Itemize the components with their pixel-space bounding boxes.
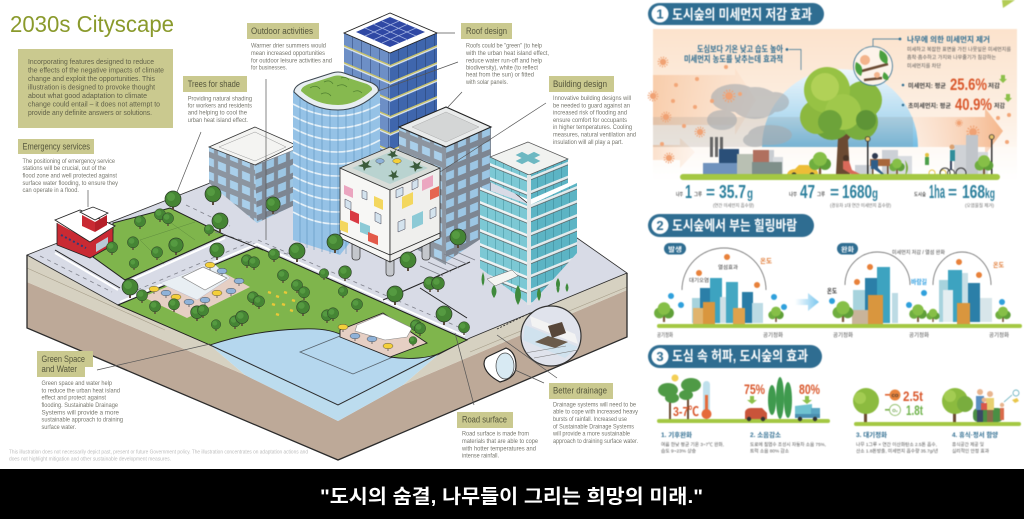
text: air purification: 3. 대기정화 [856,430,887,439]
stat row: 35.7 [719,182,746,202]
stat: ultrafine dust 40.9%: 40.9% [955,95,992,114]
callout: building design: ensure comfort for occupants [553,117,627,124]
arrow between diagrams [795,293,819,311]
callout: roof design: reduce water run-off and help [466,57,542,64]
shore pavilion [338,313,427,357]
callout: outdoor activities [247,23,332,71]
callout: green space and water: surface water. [42,424,76,431]
callout: emergency services: flood zone and well protected against [22,172,117,180]
text: climate relief: 1. 기후완화 [661,430,692,439]
wind corridor after diagram: 미세먼지 저감 / 열섬 완화 [892,249,945,256]
intro box: change and exploit the opportunities. This [28,76,155,83]
air purification labels: 공기정화 [909,331,929,339]
heat island before diagram [654,243,787,324]
stat: fine dust 25.6%: 미세먼지: 평균 [908,82,946,90]
callout: green space and water: flooding. Sustainable Drainage [42,402,118,409]
section 1 heading: 도시숲의 미세먼지 저감 효과 [672,6,812,22]
leaf removal text: 미세하고 복잡한 표면을 가진 나뭇잎은 미세먼지를 [907,46,1011,53]
parking bays [420,250,475,276]
city forest caption [684,44,801,70]
callout: outdoor activities: for businesses. [251,64,287,71]
callout: outdoor activities: mean increased opportunities [251,50,325,57]
tall blue solar building [344,13,437,155]
text: rest and wellbeing: 휴식공간 제공 및 [952,441,985,448]
callout: emergency services: stations will be crucial, out of the [22,165,106,172]
icon: air purification: 2.5t [903,388,923,404]
ground strip 3b [854,422,1021,426]
icon: air purification: CO [892,393,899,398]
callout: trees for shade: Trees for shade [188,79,240,89]
section 2 heading: 도시숲에서 부는 힐링바람 [672,218,797,234]
callout: green space and water: Green space and water help [42,380,112,387]
road markings [40,190,470,332]
intro box: change could entail – it does not attempt to [28,101,160,108]
city forest caption: 도심보다 기온 낮고 습도 높아 [697,44,783,54]
callout: trees for shade: urban heat island effect. [188,117,248,124]
stat row: (경유차 1대 연간 미세먼지 흡수량) [830,202,891,209]
stat row: 그루 [817,192,825,198]
stat: fine dust 25.6%: 저감 [988,82,1001,90]
street life [787,135,994,178]
callout: road surface: with hotter temperatures and [461,445,536,452]
callout: green space and water: Systems will provide a more [42,409,119,416]
road and plaza surface [27,165,627,407]
text: rest and wellbeing [952,430,998,454]
icon: air purification [853,388,923,423]
callout: outdoor activities: Outdoor activities [251,26,313,36]
stat: ultrafine dust 40.9%: 저감 [994,102,1005,110]
wind corridor after diagram [827,243,1011,324]
grey right building [399,107,491,265]
kerb lines [55,235,470,340]
city forest caption: 미세먼지 농도를 낮추는데 효과적 [684,54,783,64]
callout: better drainage: will provide a more sustainable [552,431,630,438]
stat row: kg [985,185,995,201]
dust particles [648,57,1011,163]
callout: building design: be needed to guard against an [553,102,630,109]
icon: climate relief: 3-7℃ [673,404,699,419]
stat row: (오염물질 제거) [965,202,994,209]
callout: roof design: Roofs could be "green" (to help [466,43,542,50]
callout: green space and water: Green Space [42,354,85,364]
stat row: 1680 [842,182,872,202]
callout: building design [549,76,636,146]
stat row: = [706,183,715,202]
wind corridor after diagram: 온도 [827,287,837,295]
text: noise reduction: 2. 소음감소 [750,430,781,439]
flower beds [268,292,295,315]
intro box: illustration is designed to provoke thought [28,84,155,91]
wind corridor after diagram: 바람길 [911,277,927,286]
callout: building design: insulation will all play a part. [553,139,623,146]
intro box [18,49,173,128]
callout: roof design: Roof design [466,26,507,36]
intro box: Incorporating features designed to reduce [28,59,154,66]
callout: building design: Building design [553,79,607,89]
isometric city illustration [9,11,639,462]
water [210,329,440,421]
callout: emergency services [18,139,119,194]
leaf removal text: 흡착·흡수하고 가지와 나무줄기가 침강하는 [907,54,996,61]
text: noise reduction: 도로에 침엽수 조성시 자동차 소음 75%, [750,441,826,448]
caption bar [0,469,1024,519]
section 3 heading [648,345,822,368]
icon: noise reduction: 75% [744,381,765,397]
stat row [676,182,995,209]
callout: road surface: materials that are able to cope [462,438,538,445]
callout: road surface: Road surface is made from [462,430,529,438]
callout: emergency services: The positioning of emergency service [22,158,115,165]
stat row: = [830,183,839,202]
stat: fine dust 25.6%: 25.6% [950,75,987,94]
dotted drain connector [497,313,530,329]
caption bar: "도시의 숨결, 나무들이 그리는 희망의 미래." [320,486,703,508]
callout: trees for shade: and helping to cool the [188,110,247,117]
leaf removal text: 나무에 의한 미세먼지 제거 [907,34,990,44]
leaf removal text: 미세먼지를 차단 [907,62,941,70]
section 3 heading: 3 [656,349,664,364]
heat island before diagram: 발생 [668,244,682,254]
heat island before diagram: 열섬효과 [718,264,738,271]
callout: road surface: intense rainfall. [462,452,499,460]
grey left building [209,127,296,223]
stat row: 나무 [789,191,797,198]
stat row: 나무 [676,191,683,198]
text: rest and wellbeing: 심리적인 안정 효과 [952,448,990,454]
magnified drainage detail [521,306,581,366]
air purification labels: 공기정화 [833,331,853,339]
disclaimer note: does not highlight mitigation and other sustainable development measures. [9,456,171,462]
air purification labels: 공기정화 [657,331,673,339]
callout: green space and water: and Water [42,364,77,374]
icon: climate relief [658,374,712,419]
intro box: provide any definite answers or solutions. [28,110,152,117]
callout: trees for shade: for workers and residents [188,102,252,109]
stat row: 168 [962,182,985,202]
wind corridor after diagram: 온도 [993,261,1004,269]
stat row: = [948,183,957,202]
section 1 heading: 1 [656,6,664,22]
green space [118,247,467,358]
icon: noise reduction: 80% [799,381,820,397]
trees [106,186,470,346]
callout: roof design: with the urban heat island effect, [465,50,549,57]
factory and skyline [703,135,988,176]
stat row: (연간 미세먼지 흡수량) [713,202,754,209]
stat row: g [872,185,878,201]
stat row: 47 [800,182,815,202]
callout: trees for shade [183,76,252,124]
fire station [55,207,115,258]
section 1 illustration [648,29,1017,180]
icon: air purification: 1.8t [906,402,923,418]
korean urban forest panel [648,0,1022,454]
corner leaf [1002,0,1015,8]
section 2 heading: 2 [656,218,664,233]
text: rest and wellbeing: 4. 휴식·정서 함양 [952,430,998,439]
callout: building design: in higher temperatures. Cooling [553,124,632,131]
callout: emergency services: Emergency services [22,142,90,152]
callout: green space and water [37,351,123,431]
callout: green space and water: effect and protect against [42,395,106,402]
callout: outdoor activities: Warmer drier summers would [251,43,326,50]
stat row: 1 [685,182,692,202]
callout: emergency services: surface water flooding, to ensure they [22,180,119,187]
callout: better drainage: able to cope with increased heavy [553,409,639,416]
callout: green space and water: sustainable approach to draining [42,417,123,424]
section 1 heading [648,3,824,25]
callout: better drainage: bursts of rainfall. Increased use [553,416,627,423]
text: noise reduction [750,430,826,454]
ground cross-section [27,255,627,460]
callout: emergency services: can operate in a flood. [22,187,79,194]
leaf magnifier [854,38,901,86]
callout: green space and water: to reduce the urban heat island [42,387,120,394]
callout: road surface [457,412,538,460]
text: air purification: 산소 1.8톤방출, 미세먼지 흡수량 35.7g/년 [856,448,938,454]
callout: building design: measures, natural ventilation and [553,132,636,139]
text: climate relief: 습도 9~23% 상승 [661,448,697,454]
callout: roof design: heat from the sun) or fitted [466,72,534,79]
callout: building design: Innovative building designs will [553,95,631,102]
large tree [800,67,882,174]
title: 2030s Cityscape [10,11,174,37]
callout: trees for shade: Providing natural shading [188,95,252,102]
round building with green roof [293,72,380,255]
stat: ultrafine dust 40.9% [902,94,1012,114]
wind corridor after diagram: 완화 [841,244,854,254]
stat row: g [747,185,753,201]
teal building [480,142,577,305]
icon: family in the park [942,388,1019,422]
section 2 heading [648,214,814,237]
small park [93,208,225,280]
callout: road surface: Road surface [462,414,507,424]
white pavements [55,238,465,336]
stat row: 1ha [929,182,946,202]
callout: better drainage [549,383,639,445]
stat row: 도시숲 [914,191,926,198]
icon: air purification: O₂ [892,408,898,413]
heat island before diagram: 대기오염 [689,277,709,284]
leader lines [88,33,557,405]
air pollution haze [707,84,792,147]
intro box: about what good adaptation to climate [28,93,147,100]
callout: roof design: biodiversity), white (to reflect [466,64,538,71]
air purification labels: 공기정화 [763,331,783,339]
callout: roof design [461,23,549,86]
callout: outdoor activities: for outdoor leisure activities and [251,57,332,64]
leaf removal text [907,34,1011,70]
icon: noise reduction [744,377,820,421]
text: air purification: 나무 1그루 × 연간 이산화탄소 2.5톤 흡수, [856,441,937,448]
colourful white building [340,147,440,276]
air purification labels [657,331,1009,339]
callout: better drainage: Better drainage [553,386,607,396]
ground strip 3a [657,419,830,423]
heat island before diagram: 온도 [760,257,772,265]
text: noise reduction: 트럭 소음 80% 감소 [750,448,790,454]
section 3 heading: 도심 속 허파, 도시숲의 효과 [672,348,808,364]
disclaimer note: This illustration does not necessarily depict past, present or future Government policy. The illustration concentrates on adaptation actions and [9,450,308,456]
stat row: 그루 [694,192,702,198]
callout: better drainage: of Sustainable Drainage Systems [553,423,634,430]
stat: ultrafine dust 40.9%: 초미세먼지: 평균 [908,102,951,110]
air purification labels: 공기정화 [989,331,1009,339]
text: climate relief: 여름 한낮 평균 기온 3~7℃ 완화, [661,441,724,448]
section 2 ground strip [657,324,1022,328]
central pavilion and plaza [143,262,250,318]
callout: building design: increased risk of flooding and [553,110,627,117]
ground strip [680,174,1000,180]
text: climate relief [661,430,724,454]
callout: better drainage: approach to draining surface water. [553,438,638,445]
callout: better drainage: Drainage systems will need to be [553,401,636,408]
disclaimer note [9,450,308,462]
intro box: the effects of the negative impacts of climate [28,67,164,74]
text: air purification [856,430,938,454]
callout: roof design: with solar panels. [465,79,508,86]
drain pipe [484,348,516,382]
stat: fine dust 25.6% [902,75,1007,94]
